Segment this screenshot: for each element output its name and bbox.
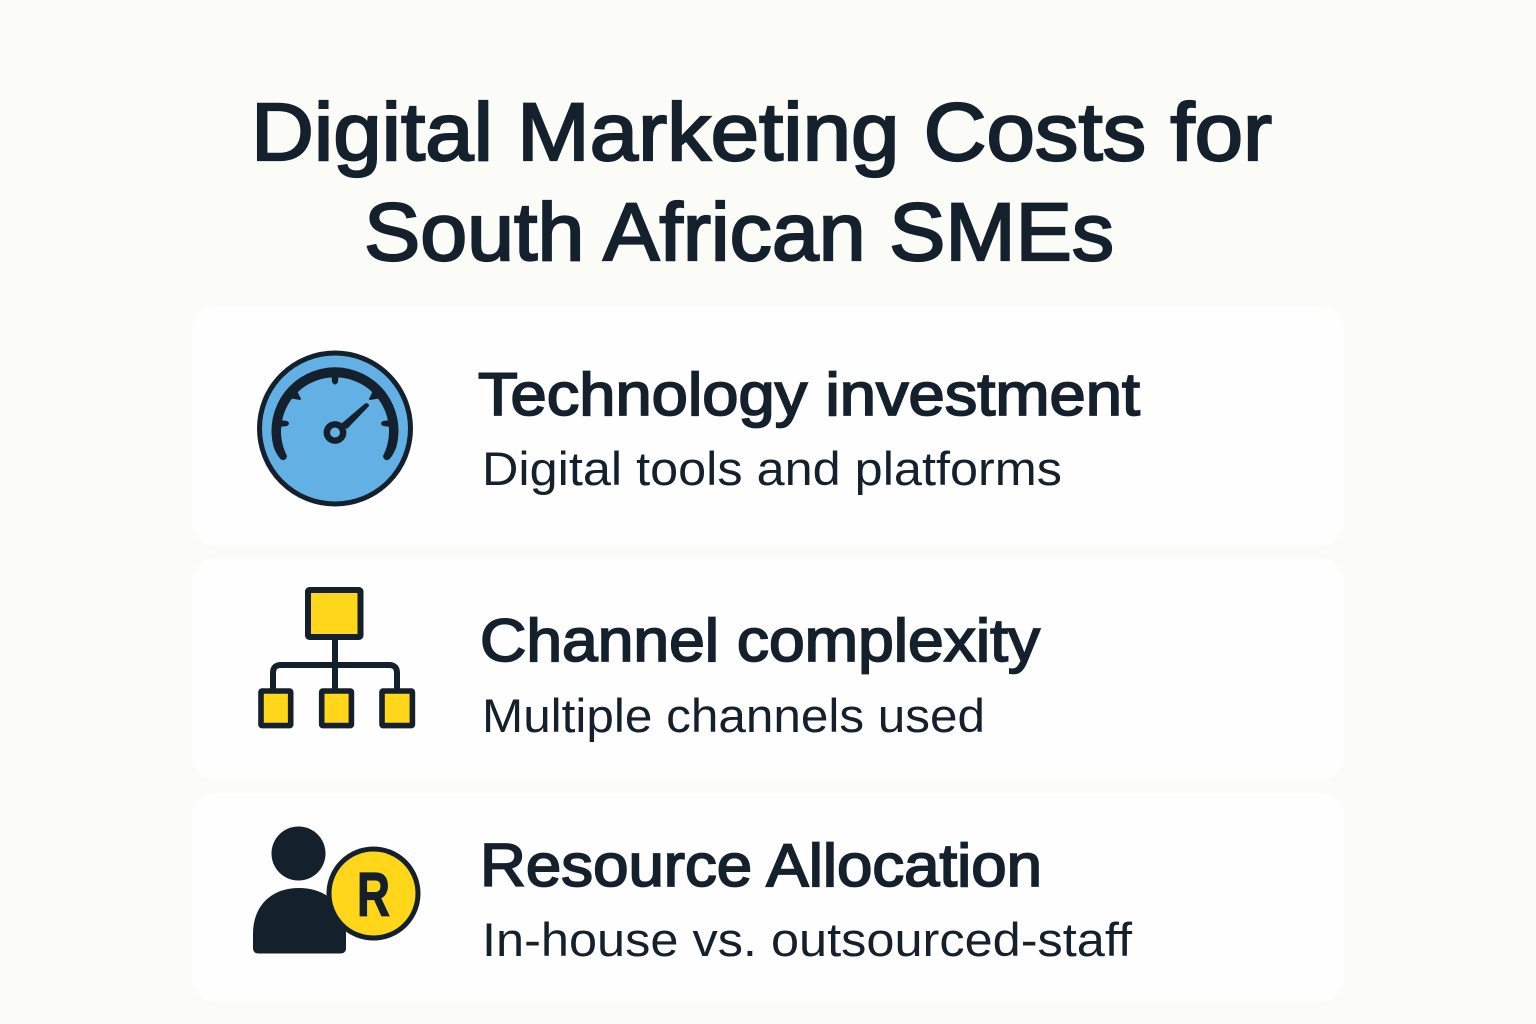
title: South African SMEs — [364, 187, 1114, 278]
icon: speedometer gauge — [260, 353, 410, 504]
text: multiple channels used: Multiple channels used — [482, 690, 985, 743]
icon: person with rand coin — [253, 826, 418, 954]
icon: person with rand coin: R — [357, 861, 390, 930]
text: digital tools and platforms: Digital tools and platforms — [482, 443, 1062, 496]
heading: resource allocation: Resource Allocation — [480, 832, 1042, 899]
heading: channel complexity: Channel complexity — [480, 607, 1040, 674]
panel: technology investment — [192, 306, 1344, 545]
icon: hierarchy network — [261, 590, 412, 726]
panel: channel complexity — [192, 559, 1344, 780]
title — [251, 87, 1272, 278]
panel: resource allocation — [192, 793, 1344, 1001]
heading: technology investment: Technology investment — [478, 361, 1140, 428]
title: Digital Marketing Costs for — [251, 87, 1272, 178]
text: in-house vs outsourced staff: In-house vs. outsourced-staff — [482, 914, 1133, 967]
